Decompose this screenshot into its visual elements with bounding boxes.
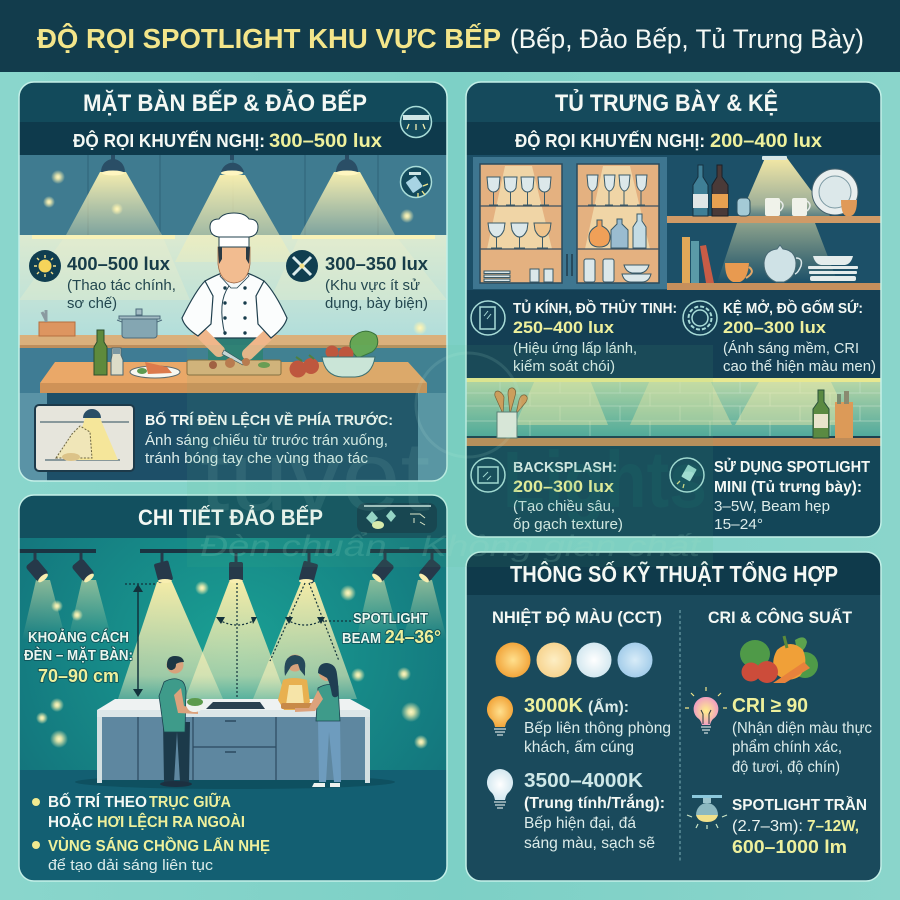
item: backsplash: 200–300 lux (513, 477, 615, 496)
beam label: 24–36° (385, 627, 441, 647)
subtitle: (Bếp, Đảo Bếp, Tủ Trưng Bày) (510, 24, 864, 54)
CRI text: độ tươi, độ chín) (732, 759, 840, 776)
3500-4000K text: sáng màu, sạch sẽ (524, 835, 655, 852)
callout: 400-500 lux: (Thao tác chính, (67, 277, 176, 294)
panel: chi tiết đảo bếp (19, 495, 447, 881)
item: mini spotlight: SỬ DỤNG SPOTLIGHT (714, 457, 870, 476)
item: open shelf: cao thể hiện màu men) (723, 358, 876, 375)
inset caption: tránh bóng tay che vùng thao tác (145, 450, 368, 467)
sparkle lights (36, 581, 428, 749)
item: mini spotlight: 15–24° (714, 516, 763, 533)
beam annotations (125, 583, 352, 699)
beam label: BEAM (342, 630, 381, 647)
height arrow (133, 584, 143, 697)
3000K text: (Ấm): (588, 697, 629, 716)
panel: thông số kỹ thuật tổng hợp (466, 552, 881, 881)
watermark: tuvet (200, 421, 430, 531)
callout: 300-350 lux: (Khu vực ít sử (325, 277, 420, 294)
item: open shelf: 200–300 lux (723, 318, 827, 337)
watermark: Lights (503, 435, 707, 524)
CRI text: (Nhận diện màu thực (732, 720, 872, 737)
item: glass cabinet: kiểm soát chói) (513, 358, 615, 375)
backsplash with tiles (466, 378, 881, 446)
woman with jeans (295, 663, 341, 787)
oil and salt bottles (94, 330, 123, 375)
inset: lamp offset diagram (35, 405, 134, 471)
icon: neutral bulb (487, 769, 513, 808)
item: open shelf (683, 299, 876, 375)
panel: tủ trưng bày & kệ (466, 82, 881, 537)
watermark: Đèn chuẩn - Không gian chất (200, 530, 702, 563)
3000K text: Bếp liên thông phòng (524, 720, 671, 737)
man with salad (159, 656, 204, 787)
3500-4000K text: Bếp hiện đại, đá (524, 815, 636, 832)
glass cabinets (473, 157, 667, 289)
callout: 300-350 lux: 300–350 lux (325, 254, 428, 274)
panel heading: CHI TIẾT ĐẢO BẾP (138, 505, 323, 530)
spotlight spec text: SPOTLIGHT TRẦN (732, 795, 867, 814)
inset caption: BỐ TRÍ ĐÈN LỆCH VỀ PHÍA TRƯỚC: (145, 411, 393, 429)
island countertop (40, 360, 427, 393)
3000K text: 3000K (524, 695, 584, 717)
bullet list (32, 791, 270, 874)
bullet list: BỐ TRÍ THEO (48, 791, 147, 811)
icon: ceiling light (400, 106, 432, 138)
recommended lux band: 200–400 lux (710, 131, 822, 152)
spotlight spec text: 7–12W, (807, 818, 859, 835)
large beams (118, 582, 357, 699)
item: mini spotlight: MINI (Tủ trưng bày): (714, 479, 862, 496)
sparkle lights (43, 170, 427, 335)
recommended lux band: 300–500 lux (269, 131, 382, 152)
chef (182, 213, 287, 365)
distance label: ĐÈN – MẶT BÀN: (24, 647, 133, 664)
distance label: KHOẢNG CÁCH (28, 629, 129, 646)
item: backsplash: (Tạo chiều sâu, (513, 498, 615, 515)
3500-4000K text: 3500–4000K (524, 770, 644, 792)
inset caption (145, 411, 393, 467)
icon: spotlight (400, 166, 432, 198)
item: mini spotlight (670, 457, 870, 533)
item: open shelf: KỆ MỞ, ĐỒ GỐM SỨ: (723, 299, 863, 317)
spotlight spec text: 600–1000 lm (732, 837, 847, 857)
callout: 400-500 lux: 400–500 lux (67, 254, 170, 274)
item: backsplash (471, 458, 623, 533)
beam label: SPOTLIGHT (353, 610, 428, 627)
bullet list: TRỤC GIỮA (149, 791, 231, 811)
spotlight spec text: (2.7–3m): (732, 818, 803, 835)
bullet list: HƠI LỆCH RA NGOÀI (97, 812, 245, 831)
recommended lux band (515, 130, 822, 152)
item: glass cabinet: (Hiệu ứng lấp lánh, (513, 340, 637, 357)
item: open shelf: (Ánh sáng mềm, CRI (723, 340, 859, 357)
callout: 300-350 lux: dụng, bày biện) (325, 295, 428, 312)
item: glass cabinet: TỦ KÍNH, ĐỒ THỦY TINH: (513, 299, 677, 317)
food on counter (130, 331, 378, 378)
spotlight spec text (732, 795, 867, 857)
inset caption: Ánh sáng chiếu từ trước trán xuống, (145, 432, 388, 449)
recommended lux band: ĐỘ RỌI KHUYẾN NGHỊ: (73, 130, 265, 151)
CRI text: phẩm chính xác, (732, 738, 842, 756)
CRI text: CRI ≥ 90 (732, 695, 808, 717)
pendant lamps (101, 155, 358, 172)
callout: 400-500 lux (29, 250, 176, 312)
text row backgrounds (467, 290, 880, 378)
beam label (342, 610, 441, 647)
watermark (187, 345, 713, 567)
angle arrowheads (216, 617, 325, 624)
item: backsplash: ốp gạch texture) (513, 516, 623, 533)
open shelf with ceramics (667, 156, 881, 290)
item: glass cabinet (471, 299, 677, 375)
recommended lux band: ĐỘ RỌI KHUYẾN NGHỊ: (515, 130, 705, 151)
item: glass cabinet: 250–400 lux (513, 318, 615, 337)
woman cooking (278, 654, 312, 710)
counter and back items (19, 309, 447, 348)
bullet list: để tạo dải sáng liên tục (48, 857, 214, 874)
main title: ĐỘ RỌI SPOTLIGHT KHU VỰC BẾP (37, 22, 501, 54)
callout: 300-350 lux (286, 250, 428, 312)
column heading: CRI: CRI & CÔNG SUẤT (708, 608, 853, 627)
column heading: CCT: NHIỆT ĐỘ MÀU (CCT) (492, 608, 662, 627)
icon: warm bulb (487, 696, 513, 735)
island (75, 699, 395, 789)
3000K text (524, 695, 671, 756)
panel heading: TỦ TRƯNG BÀY & KỆ (555, 88, 778, 117)
panel: mặt bàn bếp & đảo bếp (19, 82, 447, 481)
color temperature swatches (496, 642, 652, 678)
distance label: 70–90 cm (38, 666, 119, 686)
panel heading: THÔNG SỐ KỸ THUẬT TỔNG HỢP (510, 560, 838, 587)
icon: CRI bulb (685, 687, 727, 733)
spot heads (25, 553, 442, 584)
3500-4000K text (524, 770, 665, 852)
3500-4000K text: (Trung tính/Trắng): (524, 793, 665, 812)
track rails (19, 549, 447, 553)
title bar (0, 0, 900, 72)
small side beams (22, 580, 447, 640)
3000K text: khách, ấm cúng (524, 739, 634, 756)
item: mini spotlight: 3–5W, Beam hẹp (714, 498, 830, 515)
distance label (24, 629, 133, 686)
icon: ceiling spotlight (687, 795, 727, 829)
bullet list: VÙNG SÁNG CHỒNG LẤN NHẸ (48, 836, 270, 855)
recommended lux band (73, 130, 382, 152)
CRI text (732, 695, 872, 776)
icon: track spotlights (357, 503, 437, 533)
light beams (19, 172, 447, 300)
panel heading: MẶT BÀN BẾP & ĐẢO BẾP (83, 88, 367, 117)
icon: vegetables (740, 636, 818, 683)
item: backsplash: BACKSPLASH: (513, 459, 617, 476)
bullet list: HOẶC (48, 812, 93, 831)
callout: 400-500 lux: sơ chế) (67, 295, 117, 312)
